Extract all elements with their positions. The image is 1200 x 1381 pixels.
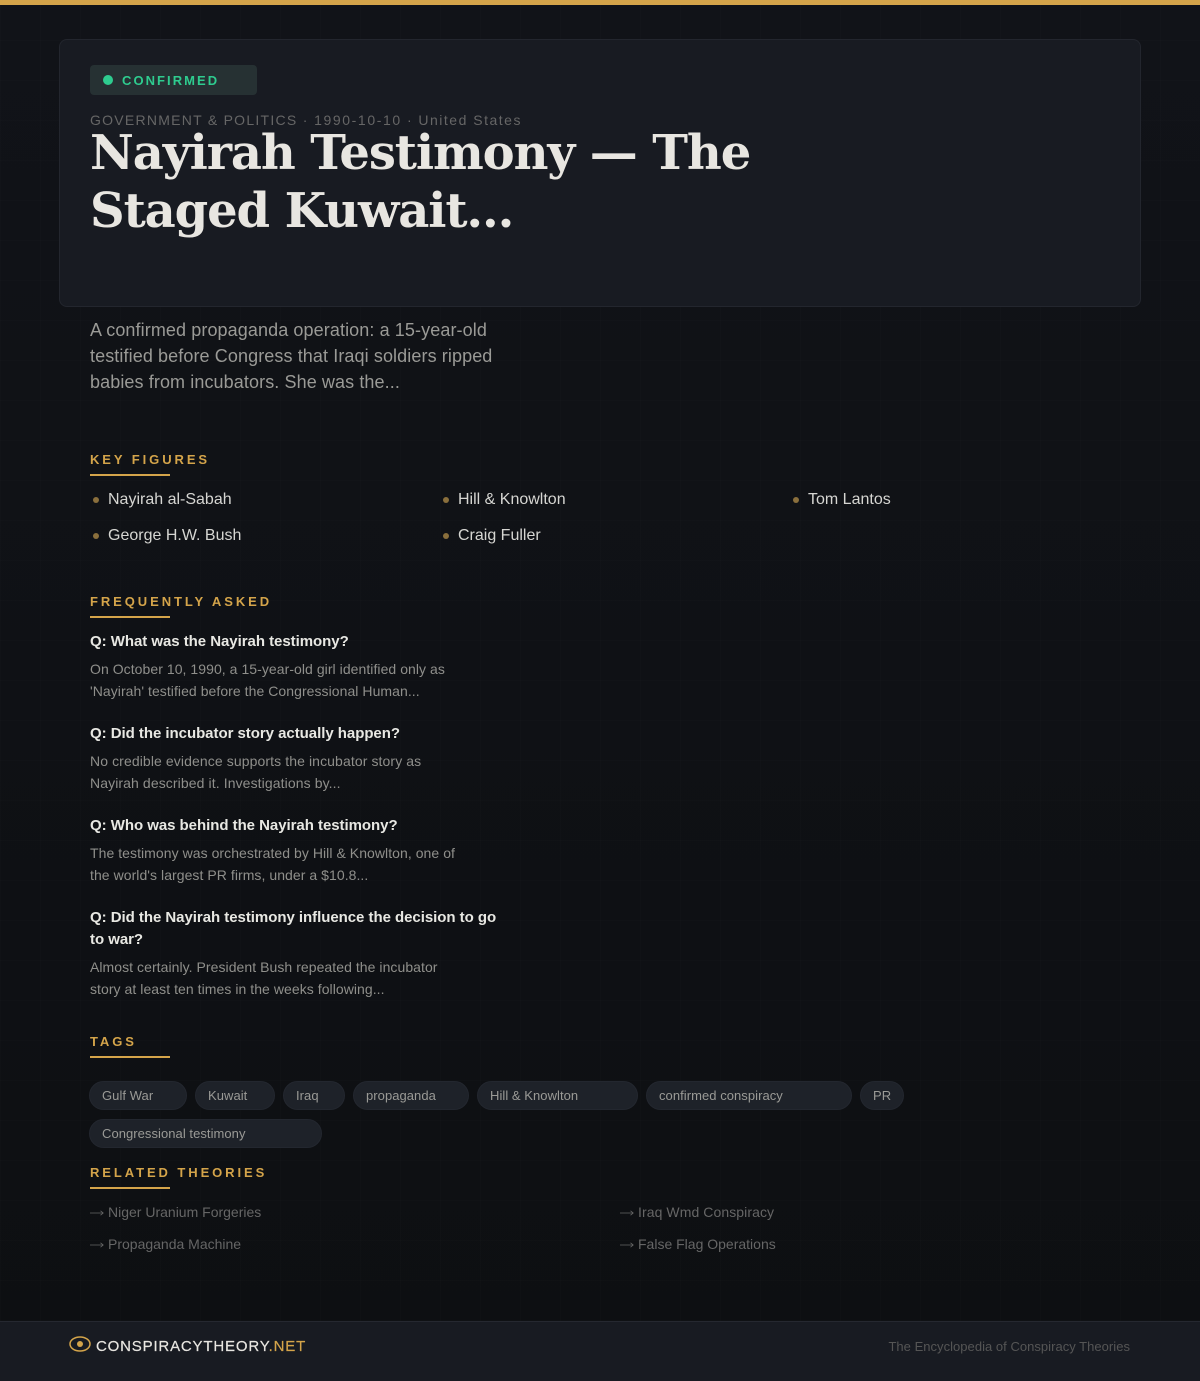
footer tagline: The Encyclopedia of Conspiracy Theories xyxy=(888,1339,1130,1354)
top accent bar xyxy=(0,0,1200,5)
tag: Iraq xyxy=(296,1088,319,1103)
icon: arrow xyxy=(90,1210,104,1216)
summary text: babies from incubators. She was the... xyxy=(90,372,400,392)
tag list xyxy=(89,1081,904,1148)
panel: hero header xyxy=(59,39,1141,307)
related theory link: False Flag Operations xyxy=(638,1236,776,1252)
heading: key figures: KEY FIGURES xyxy=(90,452,210,467)
heading: tags: TAGS xyxy=(90,1034,137,1049)
answer 1 xyxy=(90,661,445,699)
badge dot xyxy=(103,75,113,85)
tag xyxy=(283,1081,345,1110)
tag: Gulf War xyxy=(102,1088,153,1103)
question 4: Q: Did the Nayirah testimony influence the decision to go xyxy=(90,909,496,926)
icon: eye logo xyxy=(69,1336,91,1352)
related theory link: Propaganda Machine xyxy=(108,1236,241,1252)
icon: arrow xyxy=(620,1210,634,1216)
related theory link: Iraq Wmd Conspiracy xyxy=(638,1204,774,1220)
answer 3: the world's largest PR firms, under a $10.8... xyxy=(90,867,368,883)
question 1: Q: What was the Nayirah testimony? xyxy=(90,633,349,650)
question 4 xyxy=(90,909,496,948)
question 3: Q: Who was behind the Nayirah testimony? xyxy=(90,817,398,834)
status badge xyxy=(90,65,257,95)
answer 3 xyxy=(90,845,455,883)
tag xyxy=(353,1081,469,1110)
tag xyxy=(860,1081,904,1110)
answer 4: Almost certainly. President Bush repeated the incubator xyxy=(90,959,438,975)
tag xyxy=(477,1081,638,1110)
answer 2: Nayirah described it. Investigations by... xyxy=(90,775,341,791)
summary text xyxy=(90,320,492,392)
tag xyxy=(646,1081,852,1110)
tag: Hill & Knowlton xyxy=(490,1088,578,1103)
related theory link: Niger Uranium Forgeries xyxy=(108,1204,261,1220)
answer 2 xyxy=(90,753,421,791)
title: Nayirah Testimony — The xyxy=(90,125,750,181)
tag xyxy=(89,1119,322,1148)
tag: propaganda xyxy=(366,1088,436,1103)
summary text: testified before Congress that Iraqi soldiers ripped xyxy=(90,346,492,366)
figure name: Tom Lantos xyxy=(808,491,891,508)
figure name: Craig Fuller xyxy=(458,527,541,544)
badge label: CONFIRMED xyxy=(122,73,219,88)
tag xyxy=(89,1081,187,1110)
title xyxy=(90,125,750,239)
question 4: to war? xyxy=(90,931,143,948)
title: Staged Kuwait... xyxy=(90,183,513,239)
heading: frequently asked: FREQUENTLY ASKED xyxy=(90,594,272,609)
figure name: George H.W. Bush xyxy=(108,527,241,544)
answer 2: No credible evidence supports the incubator story as xyxy=(90,753,421,769)
tag: confirmed conspiracy xyxy=(659,1088,783,1103)
answer 3: The testimony was orchestrated by Hill & Knowlton, one of xyxy=(90,845,455,861)
category and date line: GOVERNMENT & POLITICS · 1990-10-10 · United States xyxy=(90,112,522,128)
figure name: Hill & Knowlton xyxy=(458,491,566,508)
tag: Congressional testimony xyxy=(102,1126,246,1141)
tag xyxy=(195,1081,275,1110)
question 2: Q: Did the incubator story actually happen? xyxy=(90,725,400,742)
answer 4: story at least ten times in the weeks following... xyxy=(90,981,385,997)
answer 4 xyxy=(90,959,438,997)
footer xyxy=(0,1321,1200,1381)
tag: Kuwait xyxy=(208,1088,247,1103)
tag: PR xyxy=(873,1088,891,1103)
heading: related theories: RELATED THEORIES xyxy=(90,1165,267,1180)
icon: arrow xyxy=(620,1242,634,1248)
answer 1: 'Nayirah' testified before the Congressional Human... xyxy=(90,683,420,699)
key figures list xyxy=(93,491,891,544)
summary text: A confirmed propaganda operation: a 15-year-old xyxy=(90,320,487,340)
icon: arrow xyxy=(90,1242,104,1248)
answer 1: On October 10, 1990, a 15-year-old girl identified only as xyxy=(90,661,445,677)
figure name: Nayirah al-Sabah xyxy=(108,491,232,508)
brand name: CONSPIRACYTHEORY.NET xyxy=(96,1338,306,1355)
